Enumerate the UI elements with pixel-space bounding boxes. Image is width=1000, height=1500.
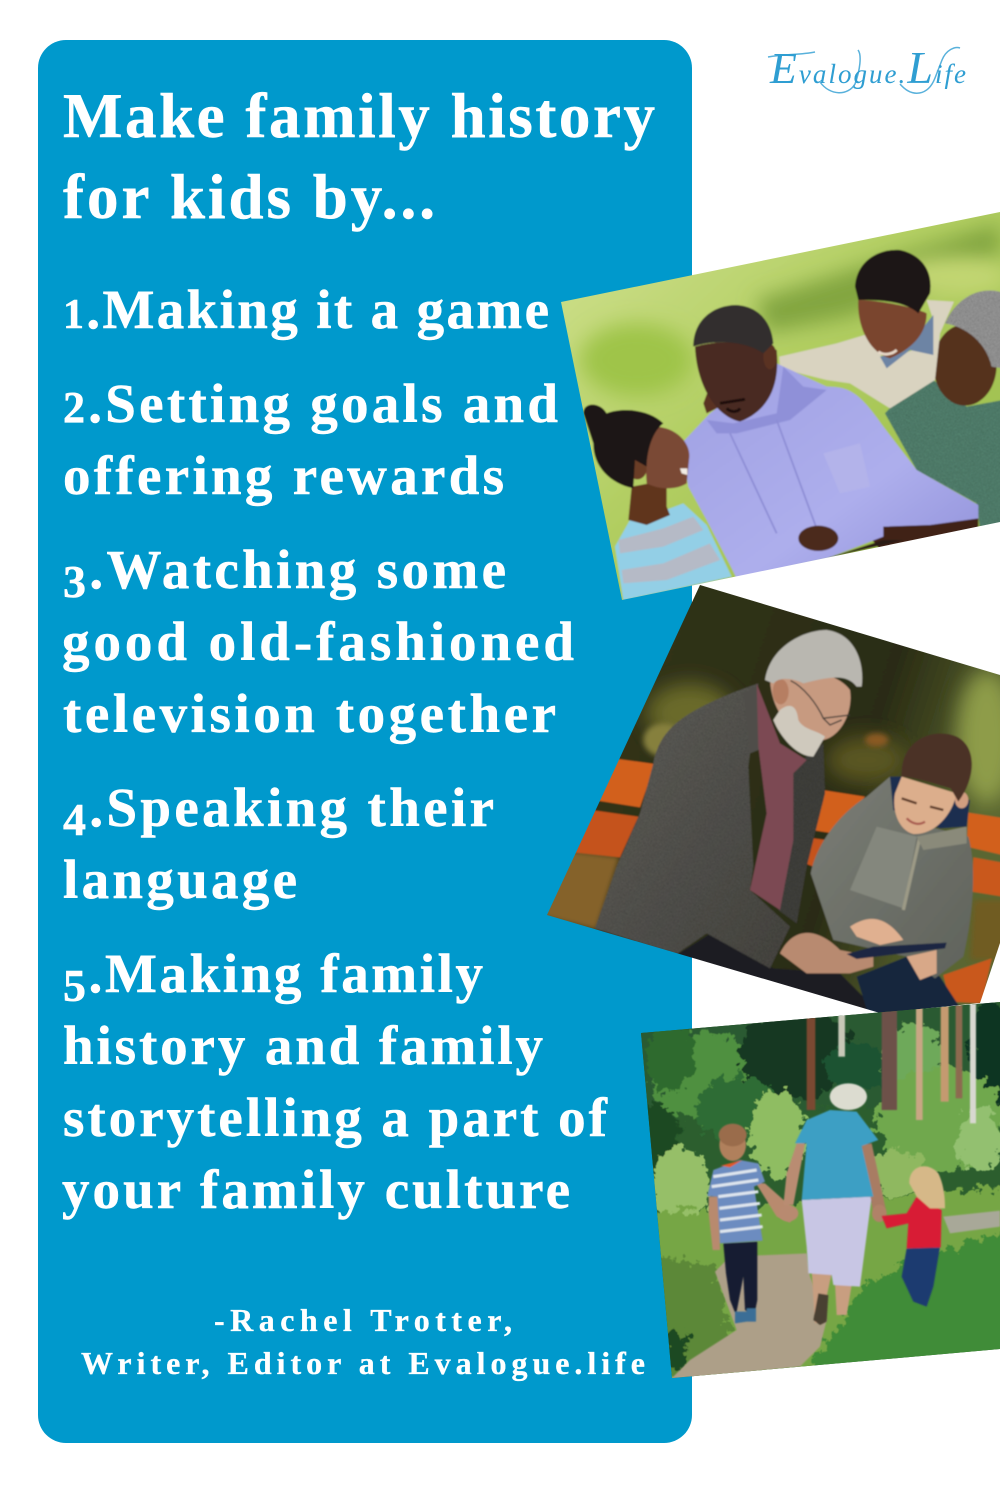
glasses <box>791 681 850 725</box>
boy hood <box>890 777 970 828</box>
hands <box>780 933 873 973</box>
attribution: -Rachel Trotter, <box>214 1302 512 1338</box>
list item 2 <box>63 373 558 506</box>
man's arm and hand <box>872 518 980 548</box>
girl neck <box>628 480 670 525</box>
logo: Evalogue.Life: Evalogue.Life <box>769 42 966 93</box>
list item 5: storytelling a part of <box>63 1087 608 1148</box>
girl shirt <box>615 503 732 600</box>
list item 5: .Making family <box>89 943 483 1004</box>
list item 3: 3 <box>63 556 86 607</box>
grandfather beard <box>773 706 825 757</box>
photo: family on green lawn <box>561 212 1000 600</box>
forest foliage <box>641 1002 1000 1217</box>
girl face <box>646 427 689 488</box>
grandfather head <box>770 670 851 740</box>
title <box>63 81 655 232</box>
boy sweater <box>779 300 954 408</box>
list item 3: good old-fashioned <box>62 611 574 672</box>
list item 4 <box>63 777 494 910</box>
list item 5: your family culture <box>62 1159 570 1220</box>
photo: grandmother walking with children on path <box>641 1002 1000 1378</box>
grandfather hair <box>765 630 862 687</box>
list item 2: offering rewards <box>63 445 504 506</box>
title: for kids by... <box>63 162 435 232</box>
list item 3: .Watching some <box>89 539 506 600</box>
grandmother face <box>933 324 997 406</box>
boy face <box>858 300 927 358</box>
man hair <box>693 305 773 353</box>
trousers <box>680 935 868 1009</box>
man shirt <box>682 363 978 578</box>
grandmother <box>778 1083 887 1325</box>
clasped hands <box>778 1205 798 1221</box>
list item 2: 2.Setting goals and <box>63 373 558 434</box>
grandfather shirt <box>750 683 807 910</box>
boy face <box>894 777 957 834</box>
list item 4: .Speaking their <box>89 777 494 838</box>
older boy <box>707 1124 797 1323</box>
path <box>670 1253 827 1380</box>
girl hand <box>798 526 838 551</box>
attribution <box>81 1302 645 1381</box>
grandmother top <box>885 380 1000 528</box>
list item 4: 4 <box>63 794 86 845</box>
list item 5: history and family <box>63 1015 543 1076</box>
list item 5: 5 <box>63 960 86 1011</box>
grandmother hair <box>945 291 1000 368</box>
bench slats <box>567 756 1000 1003</box>
list item 4: language <box>63 849 297 910</box>
title: Make family history <box>63 81 655 151</box>
list item 3: television together <box>63 683 556 744</box>
photo: grandfather and grandson on park bench <box>533 573 1000 1027</box>
grass <box>657 1182 1000 1378</box>
grandfather jacket <box>595 683 790 968</box>
boy hair <box>855 250 931 313</box>
little girl <box>882 1166 945 1307</box>
boy coat <box>811 777 973 978</box>
attribution: Writer, Editor at Evalogue.life <box>81 1345 645 1381</box>
list item 5 <box>62 943 608 1220</box>
girl hair <box>583 405 663 488</box>
list item 1: 1.Making it a game <box>63 279 549 340</box>
boy hair <box>902 733 972 802</box>
panel: blue text card <box>38 40 692 1443</box>
list item 3 <box>62 539 574 744</box>
tablet <box>847 943 947 959</box>
man head <box>695 342 777 422</box>
tree trunks <box>807 1003 976 1123</box>
